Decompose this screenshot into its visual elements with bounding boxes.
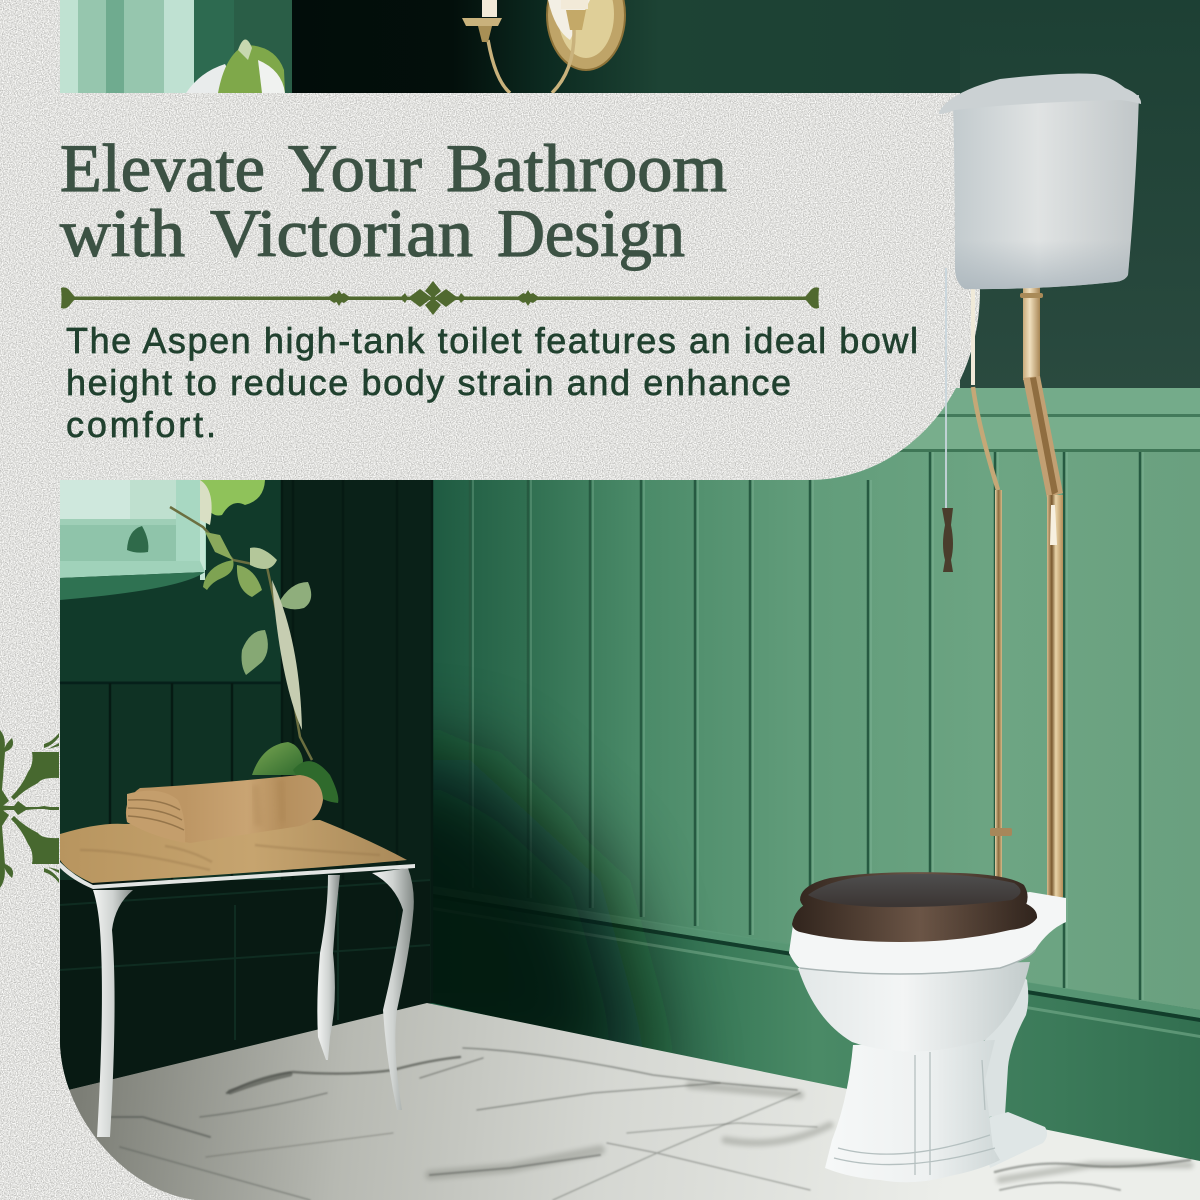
bench seat (60, 820, 407, 883)
cistern base shade (955, 240, 1131, 289)
bench legs (93, 868, 414, 1137)
lower window (60, 480, 206, 600)
top window (60, 0, 292, 93)
towel (126, 775, 323, 843)
wall sconce (462, 0, 625, 93)
pull cord (942, 268, 953, 572)
plank grooves (470, 452, 1143, 1000)
ornament: left edge flourish (0, 730, 59, 888)
upper lid (800, 872, 1028, 923)
seat creases (80, 845, 380, 870)
toilet bowl (789, 872, 1066, 1182)
baseboard (536, 908, 1200, 1161)
foot (980, 1112, 1047, 1168)
body text (66, 320, 918, 445)
plant on left (127, 480, 338, 803)
lower seat (792, 902, 1037, 942)
heading: Your (288, 130, 422, 206)
heading: Elevate (60, 130, 265, 206)
toilet cistern and pipework (939, 74, 1141, 897)
lid top face (808, 874, 1021, 907)
body text: height to reduce body strain and enhance (66, 362, 791, 403)
body text: The Aspen high-tank toilet features an ideal bowl (66, 320, 918, 361)
wall corner shadow (432, 706, 704, 1059)
overflow pipe (971, 285, 1012, 880)
upper dark wall (292, 0, 1200, 400)
heading: Design (497, 195, 685, 271)
heading: Bathroom (446, 130, 727, 206)
bench (60, 820, 415, 1137)
marble veins (110, 1048, 1190, 1200)
cistern lid (939, 74, 1141, 114)
rim shadow line (800, 950, 1035, 974)
left shadow wall (60, 480, 432, 1092)
marble floor (60, 1003, 1200, 1200)
ornamental divider (61, 281, 819, 315)
flush pipe (1017, 279, 1063, 897)
heading: with (60, 195, 185, 271)
top plant (186, 39, 285, 93)
bowl body (798, 962, 1030, 1052)
pedestal (825, 1040, 1000, 1182)
seat rim (60, 862, 415, 889)
pedestal mouldings (834, 1052, 995, 1175)
rear trap (965, 975, 1028, 1120)
body text: comfort. (66, 404, 216, 445)
cistern body (953, 95, 1139, 289)
heading: Victorian (210, 195, 473, 271)
wainscot panelling (430, 388, 1200, 1010)
heading (60, 130, 727, 271)
bowl rim (789, 892, 1066, 974)
text panel (0, 93, 980, 480)
soft marble clouding (430, 1085, 1190, 1180)
